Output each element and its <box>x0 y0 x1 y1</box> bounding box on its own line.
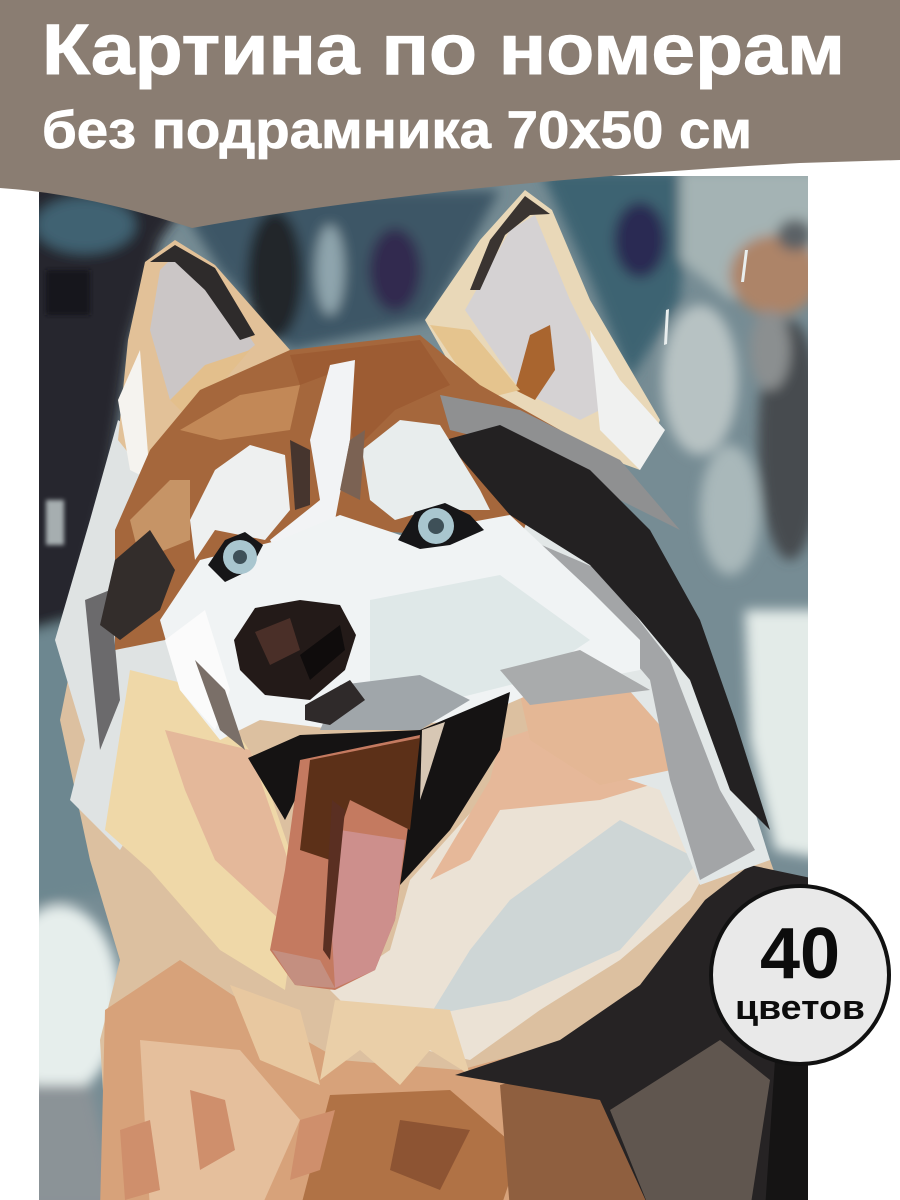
right eye <box>398 503 484 549</box>
muzzle white <box>160 515 640 740</box>
grey chest fur <box>430 820 700 1015</box>
left eye patch <box>190 445 290 560</box>
badge label: цветов <box>735 989 865 1027</box>
title line 2: без подрамника 70х50 см <box>42 101 752 160</box>
white blaze <box>270 360 355 542</box>
grey fur fringe <box>530 540 755 880</box>
open mouth <box>248 692 510 885</box>
painting: husky portrait <box>0 170 830 1200</box>
dark marking left <box>100 530 175 640</box>
top banner <box>0 0 900 228</box>
badge number: 40 <box>760 914 840 994</box>
right ear <box>425 190 665 470</box>
cream chest fur <box>105 670 300 990</box>
peach shoulder fur <box>430 731 648 880</box>
head <box>100 335 770 830</box>
grey band above dark marking <box>440 395 680 530</box>
lower chest brush strokes <box>120 1090 335 1200</box>
white outer cheek fur left <box>55 420 178 850</box>
black neck and ruff <box>455 865 820 1200</box>
peach under cheek <box>521 692 668 780</box>
left eye <box>208 532 263 582</box>
chest pale fur <box>330 786 700 1060</box>
body fur <box>55 420 820 1200</box>
nose <box>234 600 365 725</box>
left ear <box>118 240 290 480</box>
title line 1: Картина по номерам <box>42 11 845 90</box>
dark marking right of head <box>445 425 770 830</box>
brow dark <box>290 440 310 510</box>
painting background <box>0 170 830 1200</box>
tongue <box>270 735 420 990</box>
right eye patch <box>362 420 490 520</box>
right cheek fur <box>521 524 770 885</box>
lower chest brown fur <box>100 960 516 1200</box>
forehead and left cheek brown <box>115 335 560 650</box>
badge: 40 colours <box>711 886 889 1064</box>
